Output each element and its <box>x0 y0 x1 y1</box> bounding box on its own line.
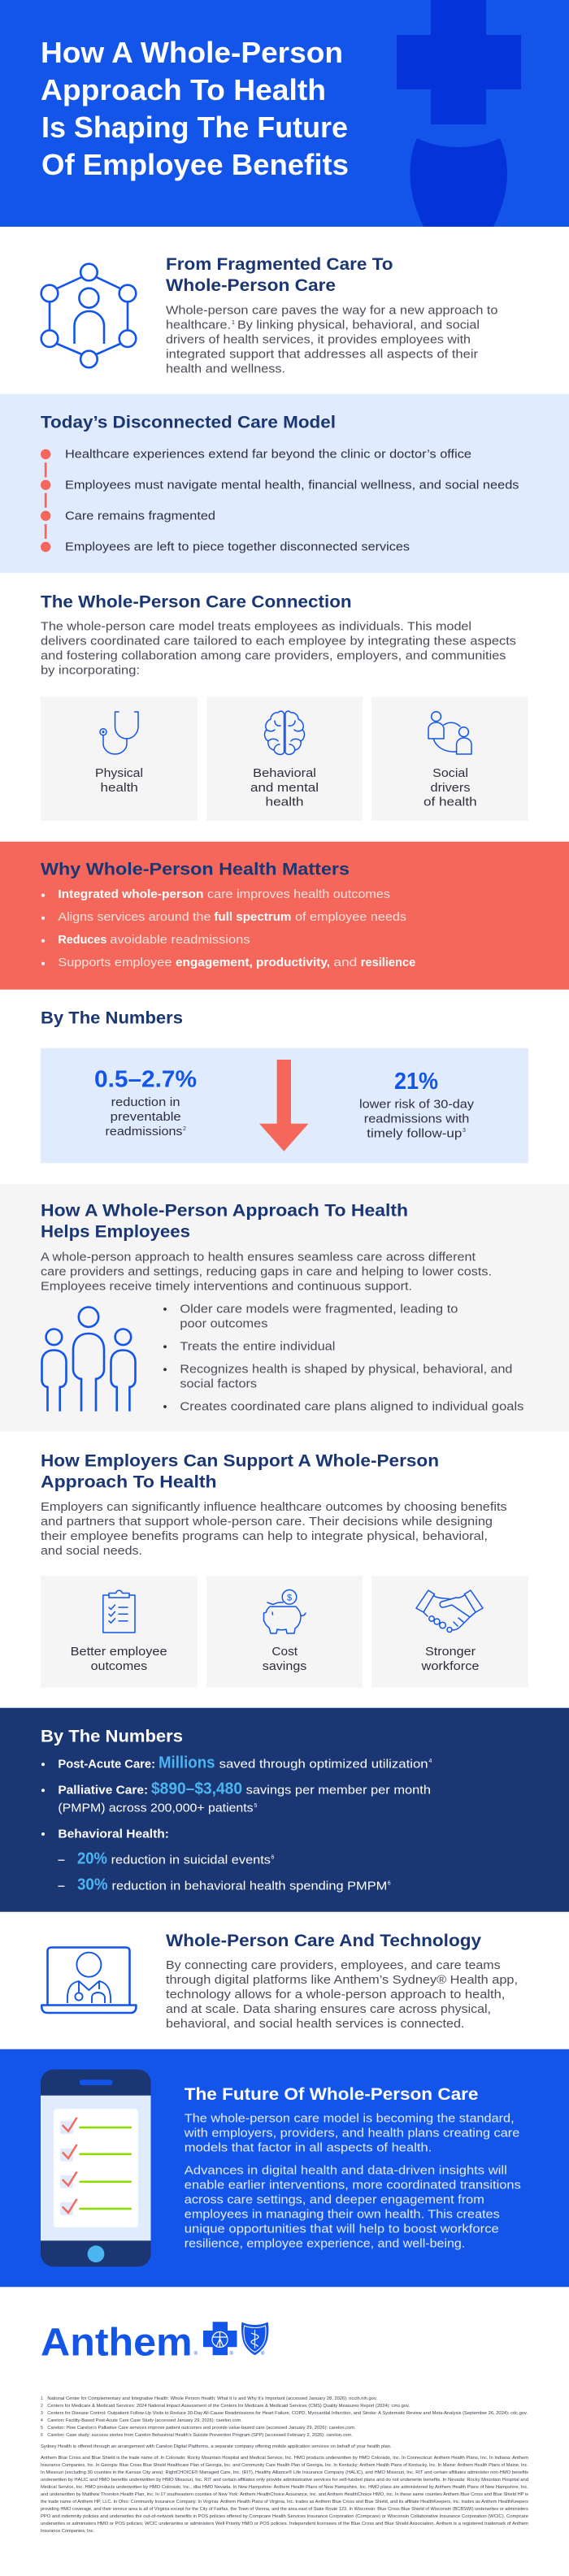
stat: behavioral health: 6 <box>388 1880 391 1887</box>
text block: and partners that support whole-person care. Their decisions while designing <box>41 1515 493 1529</box>
icon: three people <box>42 1307 135 1412</box>
stat: post-acute care: 4 <box>429 1759 432 1764</box>
stat: readmissions reduction <box>94 1067 197 1138</box>
label: savings <box>263 1659 306 1673</box>
text block: enable earlier interventions, more coordinated transitions <box>185 2179 521 2192</box>
stat: palliative care <box>58 1780 431 1815</box>
text block: employees in managing their own health. This creates <box>185 2208 500 2222</box>
text block: through digital platforms like Anthem’s Sydney® Health app, <box>166 1973 518 1987</box>
text block: integrated support that addresses all aspects of their <box>166 348 478 362</box>
stat: readmissions reduction: reduction in <box>111 1095 180 1109</box>
card: stronger workforce <box>371 1576 528 1688</box>
footnotes: Carelon: Case study: success stories from Carelon Behavioral Health’s Suicide Prevention Program (SPP) (accessed February 2, 2026): carelon.com. <box>47 2433 353 2438</box>
icon: clipboard checklist <box>103 1590 135 1633</box>
text block: delivers coordinated care tailored to each employee by integrating these aspects <box>41 635 516 648</box>
text block: and fostering collaboration among care providers, employers, and communities <box>41 649 506 663</box>
stat: behavioral health: 30% <box>77 1876 108 1893</box>
text block: with employers, providers, and health plans creating care <box>184 2127 519 2140</box>
stat: behavioral health: 6 <box>271 1854 275 1861</box>
footnotes: Medical Service, Inc. HMO products underwritten by HMO Colorado, Inc., dba HMO Nevada. In New Hampshire: Anthem Health Plans of New Hampshire, Inc. HMO plans are administered by Anthem Health Plans of New Hampshire, Inc. <box>41 2485 528 2490</box>
panel: the future of whole-person care <box>0 2049 569 2287</box>
stat: behavioral health: 20% <box>77 1850 107 1867</box>
stat: lower risk: timely follow-up <box>367 1126 462 1140</box>
footnotes: Carelon: Facility-Based Post-Acute Care Case Study (accessed January 29, 2026): carelon.com. <box>47 2418 242 2423</box>
stat: lower risk: 21% <box>394 1069 438 1095</box>
bullet list <box>180 1302 523 1413</box>
footnotes: 6 <box>41 2433 43 2438</box>
panel: by the numbers readmissions <box>41 1008 528 1163</box>
label: outcomes <box>91 1659 147 1673</box>
stat: post-acute care: Millions <box>159 1754 215 1772</box>
panel: today's disconnected care model <box>0 394 569 573</box>
panel: how a whole-person approach helps employees <box>0 1184 569 1432</box>
card: behavioral and mental health <box>206 696 363 821</box>
panel: by the numbers savings <box>0 1708 569 1912</box>
stat: readmissions reduction: 2 <box>183 1126 186 1132</box>
heading: The Whole-Person Care Connection <box>41 592 352 611</box>
text block: and social needs. <box>41 1544 142 1558</box>
icon: stethoscope <box>100 712 138 754</box>
stat: behavioral health: reduction in behavioral health spending PMPM <box>112 1879 387 1893</box>
heading: By The Numbers <box>41 1008 183 1027</box>
footnotes: PPO and indemnity policies and underwrites the out-of-network benefits in POS policies offered by Compcare Health Services Insurance Corporation (Compcare) or Wisconsin Collaborative Insurance Corporation (WCIC). Compcare <box>41 2514 528 2519</box>
text block: across care settings, and deeper engagement from <box>185 2193 484 2207</box>
stat: post-acute care <box>58 1754 432 1772</box>
panel: whole-person care and technology <box>41 1932 518 2031</box>
label <box>420 1645 480 1673</box>
logo: Anthem Blue Cross Blue Shield <box>41 2321 268 2364</box>
stat: behavioral health: Behavioral Health: <box>58 1827 169 1841</box>
footnotes <box>41 2396 529 2534</box>
footnotes: 5 <box>41 2426 43 2431</box>
label: health <box>101 781 138 795</box>
panel: why whole-person health matters <box>0 842 569 990</box>
heading: Whole-Person Care And Technology <box>166 1932 481 1950</box>
text block: By connecting care providers, employees, and care teams <box>166 1958 501 1972</box>
text block: and at scale. Data sharing ensures care across physical, <box>166 2002 491 2016</box>
icon: background cross and shield <box>397 0 521 227</box>
stat: lower risk: readmissions with <box>364 1112 469 1125</box>
bullet list <box>58 887 415 969</box>
footnotes: and underwritten by Matthew Thornton Health Plan, Inc. In 17 southeastern counties of New York: Anthem HealthChoice Assurance, Inc. and Anthem HealthChoice HMO, Inc. In these same counties Anthem Blue Cross and Blue Shield HP is <box>41 2492 529 2497</box>
icon: phone with checklist <box>41 2070 151 2266</box>
bullet markers <box>41 1763 64 1887</box>
text block: healthcare. <box>166 319 231 332</box>
stat: palliative care: 5 <box>254 1803 257 1809</box>
footnotes: Anthem Blue Cross and Blue Shield is the trade name of: In Colorado: Rocky Mountain Hospital and Medical Service, Inc. HMO products underwritten by HMO Colorado, Inc. In Connecticut: Anthem Health Plans, Inc. In Indiana: Anthem <box>41 2456 528 2461</box>
heading <box>166 255 393 295</box>
icon: handshake <box>416 1590 483 1632</box>
panel: how employers can support <box>41 1451 528 1688</box>
stat: palliative care: $890–$3,480 <box>151 1780 242 1798</box>
text block <box>41 620 516 678</box>
stat: post-acute care: Post-Acute Care: <box>58 1757 155 1771</box>
text block <box>184 2112 519 2155</box>
heading: By The Numbers <box>41 1727 183 1746</box>
footnotes: underwrites or administers HMO or POS policies; WCIC underwrites or administers Well Priority HMO or POS policies. Independent licensees of the Blue Cross and Blue Shield Association. Anthem is a registered trademark of Anthem <box>41 2522 528 2526</box>
text block: By linking physical, behavioral, and social <box>237 319 480 332</box>
footnotes: providing HMO coverage, and their service area is all of Virginia except for the City of Fairfax, the Town of Vienna, and the area east of State Route 123. In Wisconsin: Blue Cross Blue Shield of Wisconsin (BCBSWI) underwrites or administers <box>41 2507 529 2512</box>
label: Behavioral <box>253 766 316 780</box>
stat: lower risk <box>359 1069 475 1140</box>
stat: behavioral health: reduction in suicidal events <box>111 1853 271 1867</box>
panel: from fragmented care <box>41 255 497 376</box>
label: workforce <box>420 1659 480 1673</box>
label: Social <box>432 766 468 780</box>
footnotes: 3 <box>41 2411 43 2416</box>
bullet dots <box>163 1308 167 1408</box>
stat: lower risk: lower risk of 30-day <box>359 1097 475 1111</box>
bullet list: Supports employee <box>58 956 172 969</box>
bullet list: resilience <box>361 956 415 969</box>
text block: The whole-person care model treats employees as individuals. This model <box>41 620 471 634</box>
text block: health and wellness. <box>166 362 285 376</box>
text block: unique opportunities that will help to boost workforce <box>185 2223 499 2236</box>
text block: by incorporating: <box>41 664 140 678</box>
heading: Approach To Health <box>41 1472 216 1491</box>
text block <box>185 2164 521 2251</box>
text block <box>41 1500 507 1558</box>
footnotes: 4 <box>41 2418 43 2423</box>
label <box>71 1645 167 1673</box>
heading: How A Whole-Person Approach To Health <box>41 1202 408 1221</box>
text block: Whole-person care paves the way for a new approach to <box>166 304 497 318</box>
bullet list: and <box>333 956 357 969</box>
list: Healthcare experiences extend far beyond the clinic or doctor’s office <box>65 447 471 461</box>
title: Of Employee Benefits <box>41 148 349 181</box>
bullet list: poor outcomes <box>180 1316 267 1330</box>
label: health <box>265 796 304 809</box>
icon: piggy bank with coin <box>263 1589 306 1633</box>
list: Care remains fragmented <box>65 509 215 523</box>
bullet dots <box>41 894 45 965</box>
icon: piggy bank with coin: $ <box>287 1593 292 1602</box>
label <box>250 766 319 809</box>
stat: readmissions reduction: preventable <box>111 1110 181 1124</box>
footnotes: underwritten by HALIC and HMO benefits underwritten by HMO Missouri, Inc. RIT and certain affiliates only provide administrative services for self-funded plans and do not underwrite benefits. In Nevada: Rocky Mountain Hospital and <box>41 2478 528 2483</box>
text block <box>166 304 497 376</box>
logo: Anthem Blue Cross Blue Shield: ® <box>261 2351 265 2357</box>
title: How A Whole-Person <box>41 36 343 69</box>
footnotes: National Center for Complementary and Integrative Health: Whole Person Health: What It Is and Why It’s Important (accessed January 28, 2026): nccih.nih.gov. <box>47 2396 377 2401</box>
text block: behavioral, and social health services is connected. <box>166 2017 464 2031</box>
text block: their employee benefits programs can help to integrate physical, behavioral, <box>41 1529 488 1543</box>
heading: Today’s Disconnected Care Model <box>41 414 336 432</box>
title: Approach To Health <box>41 73 326 106</box>
icon: doctor on laptop <box>41 1947 136 2013</box>
bullet list: Aligns services around the <box>58 910 211 924</box>
text block: care providers and settings, reducing gaps in care and helping to lower costs. <box>41 1265 492 1279</box>
text block: Employers can significantly influence healthcare outcomes by choosing benefits <box>41 1500 507 1514</box>
text block: 1 <box>232 320 235 326</box>
list: Employees are left to piece together disconnected services <box>65 540 410 553</box>
label <box>423 766 477 809</box>
stat: readmissions reduction: 0.5–2.7% <box>94 1067 197 1093</box>
bullet list: Integrated whole-person <box>58 887 203 901</box>
timeline dots and connectors <box>41 449 50 552</box>
label: Stronger <box>425 1645 476 1659</box>
footnotes: Sydney Health is offered through an arrangement with Carelon Digital Platforms, a separate company offering mobile application services on behalf of your health plan. <box>41 2444 392 2449</box>
logo: Anthem Blue Cross Blue Shield: ® <box>229 2351 234 2357</box>
icon: connected people <box>428 712 471 754</box>
bullet list: of employee needs <box>295 910 406 924</box>
text block: Advances in digital health and data-driven insights will <box>185 2164 507 2178</box>
stat: behavioral health <box>58 1827 391 1893</box>
list: Employees must navigate mental health, financial wellness, and social needs <box>65 479 519 492</box>
text block: A whole-person approach to health ensures seamless care across different <box>41 1251 476 1264</box>
card: better employee outcomes <box>41 1576 198 1688</box>
bullet list: Creates coordinated care plans aligned to individual goals <box>180 1399 523 1413</box>
stat: post-acute care: saved through optimized utilization <box>219 1757 428 1771</box>
title: Is Shaping The Future <box>41 111 348 144</box>
heading <box>41 1451 439 1491</box>
list <box>65 447 519 553</box>
bullet list: Recognizes health is shaped by physical, behavioral, and <box>180 1363 512 1377</box>
label <box>263 1645 306 1673</box>
icon: person in connected network <box>41 264 136 367</box>
stat: lower risk: 3 <box>463 1128 466 1134</box>
heading <box>41 1202 408 1242</box>
logo: Anthem Blue Cross Blue Shield: Anthem <box>41 2321 193 2364</box>
text block: technology allows for a whole-person approach to health, <box>166 1988 505 2001</box>
text block: models that factor in all aspects of health. <box>185 2141 432 2155</box>
heading: From Fragmented Care To <box>166 255 393 274</box>
bullet list: Reduces <box>58 933 106 947</box>
text block: drivers of health services, it provides employees with <box>166 333 471 347</box>
heading: Why Whole-Person Health Matters <box>41 861 350 879</box>
label: Cost <box>271 1645 298 1659</box>
bullet list: social factors <box>180 1377 257 1391</box>
bullet list: full spectrum <box>214 910 291 924</box>
footnotes: Carelon: How Carelon’s Palliative Care services improve patient outcomes and provide value-based care (accessed January 29, 2026): carelon.com. <box>47 2426 356 2431</box>
footnotes: the trade name of Anthem HP, LLC. In Ohio: Community Insurance Company. In Virginia: Anthem Health Plans of Virginia, Inc. trades as Anthem Blue Cross and Blue Shield, and its affiliate HealthKeepers, Inc. trades as Anthem HealthKeepers <box>41 2500 529 2504</box>
panel: whole-person care connection <box>41 592 528 821</box>
icon: brain <box>265 711 304 754</box>
label: drivers <box>431 781 470 795</box>
card: social drivers of health <box>371 696 528 821</box>
footnotes: Insurance Companies, Inc. <box>41 2529 94 2534</box>
bullet list: avoidable readmissions <box>110 933 250 947</box>
heading: Helps Employees <box>41 1223 190 1242</box>
title <box>41 36 349 181</box>
label: Physical <box>95 766 143 780</box>
card: cost savings <box>206 1576 363 1688</box>
footnotes: Centers for Medicare & Medicaid Services: 2024 National Impact Assessment of the Centers for Medicare & Medicaid Services (CMS) Quality Measures Report (2024): cms.gov. <box>47 2404 410 2409</box>
bullet list: engagement, productivity, <box>176 956 330 969</box>
stat: palliative care: savings per member per month <box>246 1784 431 1798</box>
heading: How Employers Can Support A Whole-Person <box>41 1451 439 1470</box>
text block: The whole-person care model is becoming the standard, <box>185 2112 515 2126</box>
footnotes: In Missouri (excluding 30 counties in the Kansas City area): RightCHOICE® Managed Care, Inc. (RIT), Healthy Alliance® Life Insurance Company (HALIC), and HMO Missouri, Inc. RIT and certain affiliates administer non-HMO benefits <box>41 2470 529 2475</box>
footnotes: Centers for Disease Control: Outpatient Follow-Up Visits to Reduce 30-Day All-Cause Readmissions for Heart Failure, COPD, Myocardial Infarction, and Stroke: A Systematic Review and Meta-Analysis (September 26, 2024): cdc.gov. <box>47 2411 528 2416</box>
footnotes: 2 <box>41 2404 43 2409</box>
text block: resilience, employee experience, and well-being. <box>185 2237 465 2251</box>
label: of health <box>423 796 477 809</box>
stat: palliative care: Palliative Care: <box>58 1784 148 1798</box>
text block <box>166 1958 518 2031</box>
footnotes: Insurance Companies, Inc. In Georgia: Blue Cross Blue Shield Healthcare Plan of Georgia, Inc. and Community Care Health Plan of Georgia, Inc. In Kentucky: Anthem Health Plans of Kentucky, Inc. In Maine: Anthem Health Plans of Maine, Inc. <box>41 2463 528 2468</box>
card: physical health <box>41 696 198 821</box>
text block <box>41 1251 492 1294</box>
stat: palliative care: (PMPM) across 200,000+ patients <box>58 1802 254 1815</box>
text block: Employees receive timely interventions and continuous support. <box>41 1280 412 1294</box>
heading: The Future Of Whole-Person Care <box>185 2085 478 2104</box>
label <box>95 766 143 795</box>
bullet list: Older care models were fragmented, leading to <box>180 1302 458 1316</box>
stat: readmissions reduction: readmissions <box>106 1125 182 1138</box>
bullet list: Treats the entire individual <box>180 1339 335 1353</box>
bullet list: care improves health outcomes <box>207 887 390 901</box>
label: and mental <box>250 781 319 795</box>
label: Better employee <box>71 1645 167 1659</box>
arrow: down <box>259 1060 309 1151</box>
panel: header banner <box>0 0 569 227</box>
heading: Whole-Person Care <box>166 276 336 295</box>
logo: Anthem Blue Cross Blue Shield: ® <box>193 2351 198 2357</box>
footnotes: 1 <box>41 2396 43 2401</box>
